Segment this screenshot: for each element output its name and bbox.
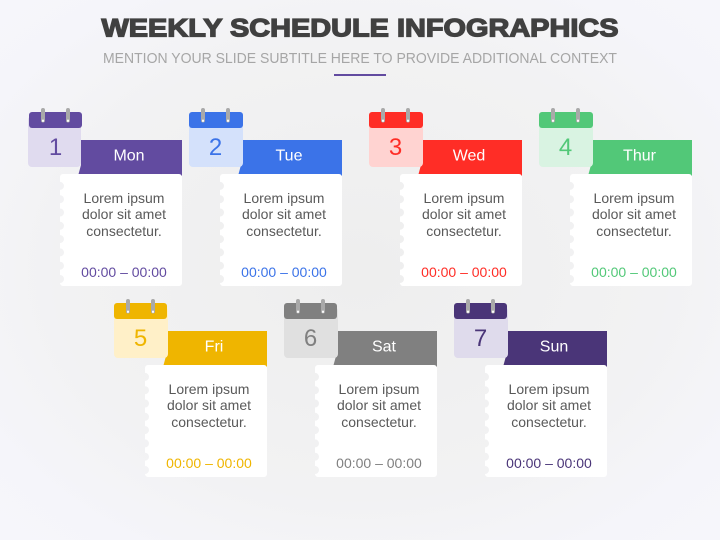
- icon: calendar 7: 7: [474, 325, 487, 352]
- card: Tue details: consectetur.: [246, 223, 322, 239]
- card: Tue details: dolor sit amet: [242, 206, 326, 222]
- day header: Mon: [78, 140, 182, 176]
- card: Thur details: consectetur.: [596, 223, 672, 239]
- title: WEEKLY SCHEDULE INFOGRAPHICS: [102, 14, 618, 42]
- card: Sat details: consectetur.: [341, 414, 417, 430]
- card: Wed details: 00:00 – 00:00: [421, 264, 507, 280]
- card: Mon details: [60, 174, 182, 286]
- icon: calendar 3: [369, 110, 423, 167]
- icon: calendar 6: 6: [304, 325, 317, 352]
- day header: Sat: Sat: [372, 338, 397, 356]
- day header: Fri: [163, 331, 267, 367]
- card: Fri details: [145, 365, 267, 477]
- card: Tue details: Lorem ipsum: [244, 190, 324, 206]
- card: Sun details: 00:00 – 00:00: [506, 455, 592, 471]
- icon: calendar 2: 2: [209, 134, 222, 161]
- icon: calendar 5: 5: [134, 325, 147, 352]
- day header: Wed: [418, 140, 522, 176]
- card: Mon details: Lorem ipsum: [84, 190, 164, 206]
- card: Fri details: Lorem ipsum: [169, 381, 249, 397]
- panel: day 2 Tuesday: [189, 110, 342, 286]
- card: Thur details: 00:00 – 00:00: [591, 264, 677, 280]
- subtitle: MENTION YOUR SLIDE SUBTITLE HERE TO PROVIDE ADDITIONAL CONTEXT: [103, 51, 617, 67]
- day header: Sun: [503, 331, 607, 367]
- icon: calendar 3: 3: [389, 134, 402, 161]
- card: Wed details: consectetur.: [426, 223, 502, 239]
- card: Mon details: dolor sit amet: [82, 206, 166, 222]
- panel: day 5 Friday: [114, 301, 267, 477]
- card: Fri details: 00:00 – 00:00: [166, 455, 252, 471]
- icon: calendar 1: 1: [49, 134, 62, 161]
- card: Mon details: consectetur.: [86, 223, 162, 239]
- panel: day 6 Saturday: [284, 301, 437, 477]
- card: Sun details: [485, 365, 607, 477]
- panel: day 3 Wednesday: [369, 110, 522, 286]
- card: Sat details: 00:00 – 00:00: [336, 455, 422, 471]
- icon: calendar 1: [28, 110, 82, 167]
- day header: Thur: [588, 140, 692, 176]
- day header: Sat: [333, 331, 437, 367]
- day header: Fri: Fri: [205, 338, 223, 356]
- icon: calendar 2: [189, 110, 243, 167]
- title underline: [334, 74, 386, 76]
- card: Fri details: dolor sit amet: [167, 397, 251, 413]
- day header: Tue: Tue: [276, 148, 303, 164]
- card: Wed details: Lorem ipsum: [424, 190, 504, 206]
- icon: calendar 4: [539, 110, 593, 167]
- card: Fri details: consectetur.: [171, 414, 247, 430]
- panel: day 4 Thursday: [539, 110, 692, 286]
- card: Mon details: 00:00 – 00:00: [81, 264, 167, 280]
- icon: calendar 6: [284, 301, 338, 358]
- card: Sat details: [315, 365, 437, 477]
- card: Sun details: consectetur.: [511, 414, 587, 430]
- card: Wed details: [400, 174, 522, 286]
- panel: day 1 Monday: [28, 110, 182, 286]
- card: Sun details: dolor sit amet: [507, 397, 591, 413]
- card: Thur details: [570, 174, 692, 286]
- day header: Wed: Wed: [453, 148, 485, 164]
- icon: calendar 5: [114, 301, 168, 358]
- icon: calendar 7: [454, 301, 508, 358]
- day header: Sun: Sun: [540, 338, 568, 356]
- card: Sun details: Lorem ipsum: [509, 381, 589, 397]
- card: Thur details: dolor sit amet: [592, 206, 676, 222]
- card: Sat details: dolor sit amet: [337, 397, 421, 413]
- day header: Tue: [238, 140, 342, 176]
- card: Wed details: dolor sit amet: [422, 206, 506, 222]
- day header: Thur: Thur: [623, 148, 657, 164]
- icon: calendar 4: 4: [559, 134, 572, 161]
- day header: Mon: Mon: [113, 148, 145, 164]
- card: Thur details: Lorem ipsum: [594, 190, 674, 206]
- card: Tue details: 00:00 – 00:00: [241, 264, 327, 280]
- card: Sat details: Lorem ipsum: [339, 381, 419, 397]
- panel: day 7 Sunday: [454, 301, 607, 477]
- card: Tue details: [220, 174, 342, 286]
